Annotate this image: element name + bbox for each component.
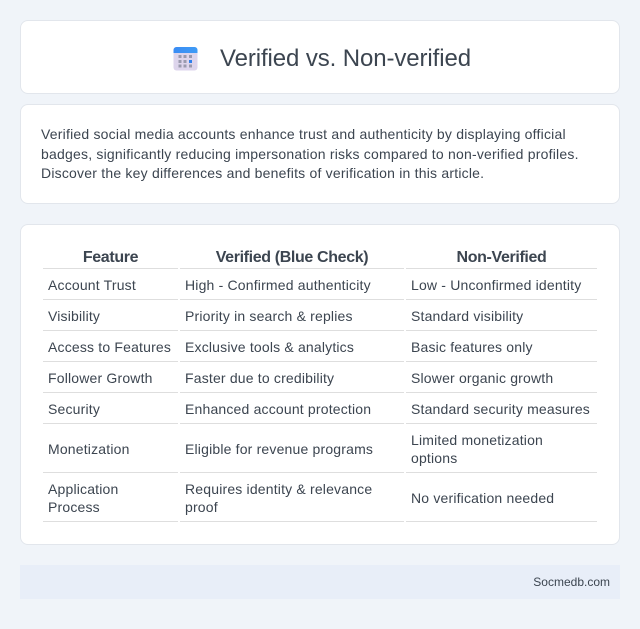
row: application process: proof [185,499,218,515]
row: account trust: Account Trust [48,277,136,293]
icon: calendar [174,47,198,70]
row: monetization: Monetization [48,441,130,457]
row: access to features [43,339,597,362]
row: visibility: Priority in search & replies [185,308,353,324]
row: follower growth: Faster due to credibility [185,370,334,386]
row: monetization: options [411,450,457,466]
panel: title card [20,20,620,94]
header row [43,249,597,269]
panel: intro text card [20,104,620,204]
row: access to features: Basic features only [411,339,533,355]
intro paragraph: badges, significantly reducing impersonation risks compared to non-verified profiles. [41,146,579,162]
row: access to features: Exclusive tools & analytics [185,339,354,355]
panel: comparison table card [20,224,620,545]
row: application process: Process [48,499,100,515]
row: monetization: Limited monetization [411,432,543,448]
header row: Feature [83,249,138,266]
row: visibility [43,308,597,331]
row: visibility: Standard visibility [411,308,523,324]
title: Verified vs. Non-verified [220,45,471,72]
row: application process [43,481,597,522]
intro paragraph: Discover the key differences and benefits of verification in this article. [41,165,484,181]
comparison table [43,249,597,522]
row: account trust [43,277,597,300]
row: security: Standard security measures [411,401,590,417]
row: follower growth: Follower Growth [48,370,153,386]
row: follower growth [43,370,597,393]
row: account trust: High - Confirmed authenticity [185,277,371,293]
row: account trust: Low - Unconfirmed identity [411,277,581,293]
row: visibility: Visibility [48,308,100,324]
intro paragraph: Verified social media accounts enhance trust and authenticity by displaying official [41,126,566,142]
row: monetization: Eligible for revenue programs [185,441,373,457]
footer source label: Socmedb.com [533,575,610,589]
header row: Verified (Blue Check) [216,249,368,266]
row: follower growth: Slower organic growth [411,370,553,386]
row: application process: Application [48,481,118,497]
row: access to features: Access to Features [48,339,171,355]
intro paragraph [41,126,579,181]
row: monetization [43,432,597,473]
row: security: Security [48,401,100,417]
row: security [43,401,597,424]
footer bar [20,565,620,599]
row: security: Enhanced account protection [185,401,371,417]
row: application process: Requires identity & relevance [185,481,372,497]
header row: Non-Verified [457,249,546,266]
row: application process: No verification needed [411,490,554,506]
